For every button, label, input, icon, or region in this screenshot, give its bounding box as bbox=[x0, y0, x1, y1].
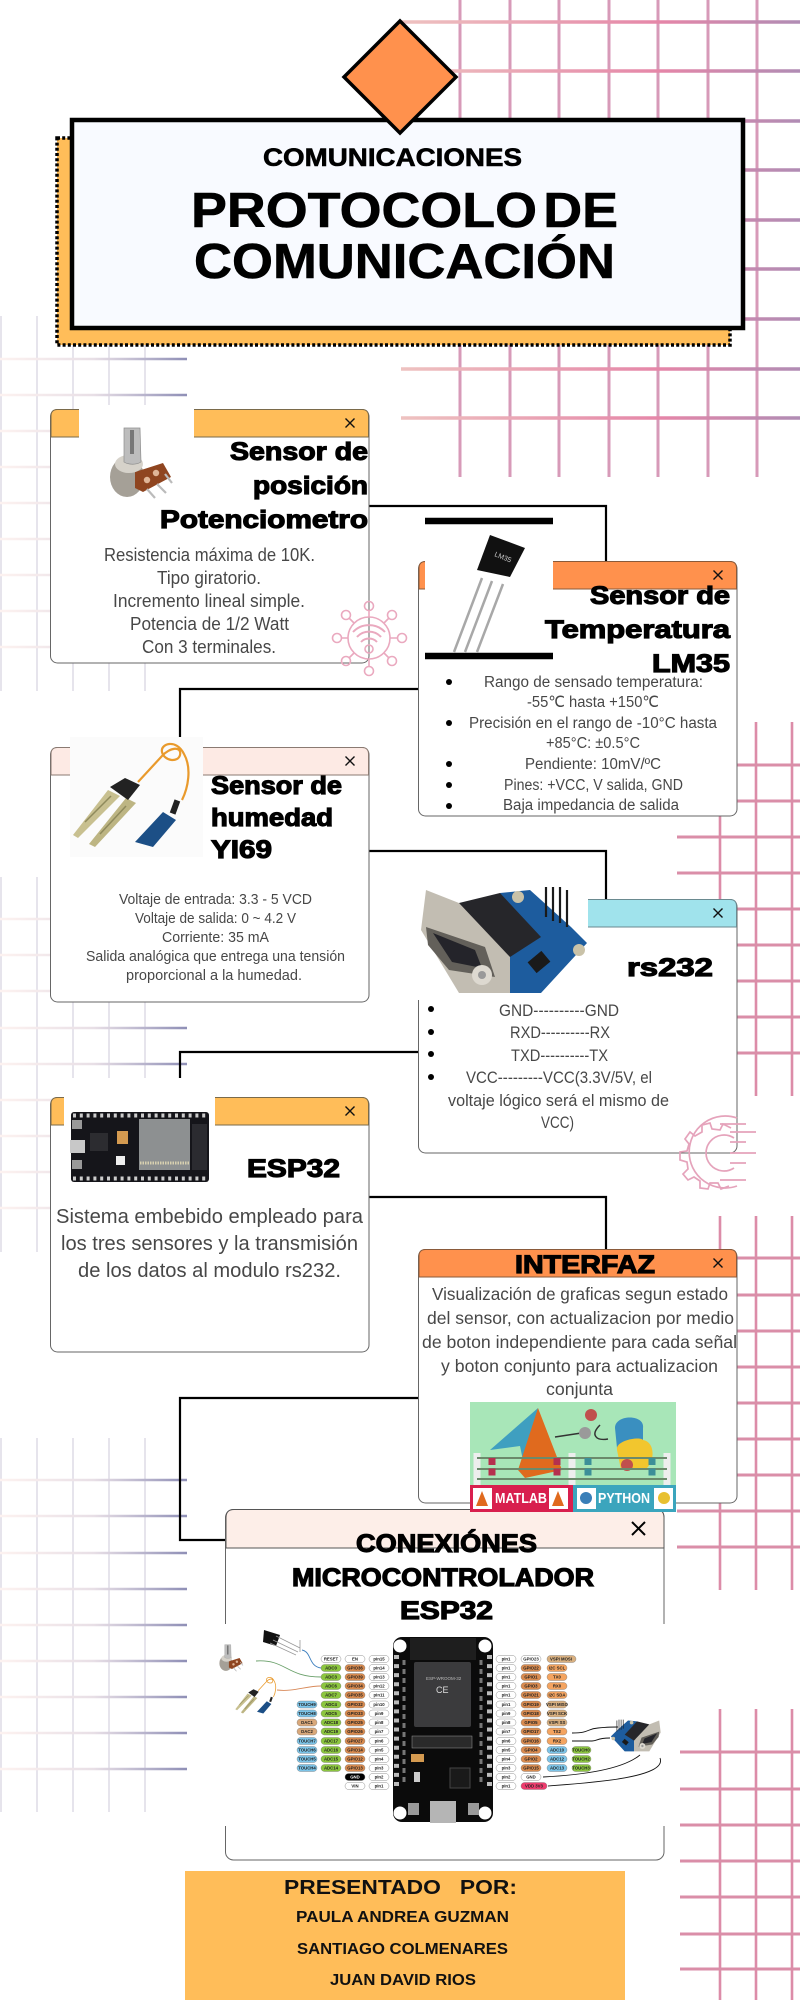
pin labels: ADC14 bbox=[324, 1766, 339, 1771]
text: temperature sensor specs: Rango de sensado temperatura: bbox=[484, 674, 703, 691]
text: ESP32 description bbox=[56, 1206, 364, 1282]
pin labels: GND bbox=[350, 1775, 360, 1780]
connector: potentiometer to LM35 bbox=[369, 506, 606, 561]
pin labels: VDD 3V3 bbox=[525, 1784, 544, 1789]
pin labels: I2C SDA bbox=[549, 1693, 565, 1698]
author name: JUAN DAVID RIOS bbox=[330, 1972, 476, 1989]
icon: LM35 thumbnail bbox=[263, 1630, 300, 1655]
pin labels: pin1 bbox=[502, 1784, 511, 1789]
heading: temperature sensor bbox=[545, 582, 731, 678]
pin labels: TOUCH7 bbox=[298, 1739, 316, 1744]
heading: humidity sensor bbox=[211, 772, 342, 864]
pin labels: RX2 bbox=[553, 1739, 562, 1744]
pin labels: GPIO34 bbox=[347, 1684, 363, 1689]
pin labels: pin1 bbox=[502, 1702, 511, 1707]
pin labels: pin3 bbox=[502, 1766, 511, 1771]
pin labels: pin13 bbox=[373, 1675, 385, 1680]
icon: wireless network bbox=[332, 602, 406, 676]
pin labels: pin2 bbox=[375, 1775, 384, 1780]
pin labels: VSPI SS bbox=[549, 1720, 565, 1725]
pin labels: ADC13 bbox=[550, 1766, 565, 1771]
pin labels: pin14 bbox=[373, 1666, 385, 1671]
icon: circuit gear bbox=[680, 1116, 756, 1189]
icon: close bbox=[346, 756, 354, 766]
icon: close bbox=[714, 1258, 722, 1268]
pin labels: TX0 bbox=[553, 1675, 562, 1680]
heading: interface: INTERFAZ bbox=[515, 1251, 655, 1279]
panel: microcontroller connections bbox=[210, 1510, 680, 1860]
pin labels: ADC16 bbox=[324, 1748, 339, 1753]
heading: connections: ESP32 bbox=[400, 1597, 493, 1625]
pin labels: ADC17 bbox=[324, 1739, 339, 1744]
pin labels: RX0 bbox=[553, 1684, 562, 1689]
panel: potentiometer sensor bbox=[50, 405, 406, 676]
pin labels: I2C SCL bbox=[549, 1666, 566, 1671]
text: temperature sensor specs: Pendiente: 10mV/ºC bbox=[525, 756, 661, 773]
pin labels: TOUCH3 bbox=[572, 1766, 590, 1771]
text: interface description bbox=[422, 1284, 737, 1399]
pin labels: pin10 bbox=[373, 1702, 385, 1707]
pin labels: pin2 bbox=[502, 1775, 511, 1780]
pin labels: GPIO16 bbox=[523, 1739, 539, 1744]
connector: LM35 to humidity sensor bbox=[180, 689, 418, 738]
text: humidity sensor specs: proporcional a la humedad. bbox=[126, 967, 302, 984]
author name: PAULA ANDREA GUZMAN bbox=[296, 1909, 509, 1926]
text: potentiometer specs bbox=[104, 545, 315, 657]
text: ESP32 description: los tres sensores y la transmisión bbox=[61, 1233, 358, 1255]
panel: humidity sensor bbox=[50, 737, 369, 1002]
ESP32 board bbox=[393, 1637, 493, 1823]
pin labels: TOUCH5 bbox=[298, 1757, 316, 1762]
pin labels: GPIO22 bbox=[523, 1666, 539, 1671]
pin labels: ADC15 bbox=[324, 1757, 339, 1762]
pin labels: GPIO23 bbox=[523, 1657, 539, 1662]
text: temperature sensor specs bbox=[446, 674, 717, 814]
text: potentiometer specs: Incremento lineal simple. bbox=[113, 591, 305, 611]
text: interface description: y boton conjunto para actualizacion bbox=[441, 1356, 718, 1376]
pin labels: pin6 bbox=[502, 1739, 511, 1744]
connector: humidity sensor to rs232 bbox=[369, 851, 606, 899]
pin labels: pin7 bbox=[502, 1729, 511, 1734]
pin labels: TOUCH9 bbox=[298, 1702, 316, 1707]
pin labels: GPIO33 bbox=[347, 1711, 363, 1716]
pin labels: TOUCH4 bbox=[298, 1766, 316, 1771]
pin labels: ADC12 bbox=[550, 1757, 565, 1762]
heading: position sensor: posición bbox=[253, 472, 368, 500]
pin labels: GPIO5 bbox=[524, 1720, 538, 1725]
panel: interface bbox=[418, 1250, 737, 1512]
text: interface description: Visualización de graficas segun estado bbox=[432, 1284, 728, 1304]
pin labels: GPIO2 bbox=[524, 1757, 538, 1762]
panel: temperature sensor bbox=[418, 521, 737, 816]
pin labels: pin6 bbox=[375, 1739, 384, 1744]
text: potentiometer specs: Resistencia máxima de 10K. bbox=[104, 545, 315, 565]
pin labels: VIN bbox=[351, 1784, 359, 1789]
pin labels: pin4 bbox=[502, 1757, 511, 1762]
pin labels: ADC7 bbox=[325, 1693, 337, 1698]
pin labels: VSPI MISO bbox=[546, 1702, 569, 1707]
pin labels: ADC19 bbox=[324, 1729, 339, 1734]
wiring lines bbox=[256, 1650, 661, 1786]
pin labels: GPIO36 bbox=[347, 1666, 363, 1671]
icon: close bbox=[714, 908, 722, 918]
text: interface description: conjunta bbox=[546, 1379, 613, 1399]
text: rs232 wiring: RXD----------RX bbox=[510, 1024, 610, 1042]
text: ESP32 description: Sistema embebido empleado para bbox=[56, 1206, 364, 1228]
pin labels: pin9 bbox=[375, 1711, 384, 1716]
text: temperature sensor specs: Pines: +VCC, V salida, GND bbox=[504, 777, 683, 794]
diagram: ESP32 pinout and wiring bbox=[219, 1630, 661, 1823]
pin labels: ADC3 bbox=[325, 1675, 337, 1680]
icon: rs232 module bbox=[421, 887, 587, 993]
illustration: MATLAB vs Python: MATLAB bbox=[495, 1490, 547, 1507]
heading: position sensor: Potenciometro bbox=[160, 506, 368, 534]
heading: temperature sensor: LM35 bbox=[652, 650, 730, 678]
connector: ESP32 to interface bbox=[369, 1197, 606, 1249]
decorative image bars bbox=[425, 521, 553, 656]
icon: ESP32 board bbox=[70, 1112, 209, 1182]
header dotted shadow bbox=[57, 138, 730, 345]
heading: ESP32: ESP32 bbox=[247, 1155, 340, 1183]
pin labels: GPIO26 bbox=[347, 1729, 363, 1734]
pin labels: TOUCH6 bbox=[298, 1748, 316, 1753]
text: rs232 wiring: VCC) bbox=[541, 1114, 574, 1132]
panel: rs232 module bbox=[418, 887, 756, 1189]
panel: authors bbox=[185, 1871, 625, 2000]
text: rs232 wiring bbox=[428, 1002, 669, 1132]
pin labels: pin5 bbox=[502, 1748, 511, 1753]
pin labels: GPIO17 bbox=[523, 1729, 539, 1734]
pin labels: DAC2 bbox=[301, 1729, 313, 1734]
icon: potentiometer thumbnail bbox=[219, 1645, 243, 1671]
pin labels: RESET bbox=[324, 1657, 339, 1662]
text: humidity sensor specs bbox=[86, 891, 345, 984]
header panel bbox=[57, 21, 743, 345]
text: humidity sensor specs: Corriente: 35 mA bbox=[162, 929, 269, 946]
pin labels: GPIO15 bbox=[523, 1766, 539, 1771]
pin labels: pin11 bbox=[374, 1693, 385, 1698]
pin labels: pin7 bbox=[375, 1729, 384, 1734]
icon: close bbox=[346, 1106, 354, 1116]
illustration: MATLAB vs Python: PYTHON bbox=[598, 1490, 650, 1507]
heading: position sensor: Sensor de bbox=[230, 438, 368, 466]
connector: interface to connections bbox=[180, 1398, 418, 1540]
pin labels: GPIO1 bbox=[524, 1675, 538, 1680]
text: humidity sensor specs: Voltaje de salida: 0 ~ 4.2 V bbox=[135, 910, 296, 927]
text: humidity sensor specs: Salida analógica que entrega una tensión bbox=[86, 948, 345, 965]
text: humidity sensor specs: Voltaje de entrada: 3.3 - 5 VCD bbox=[119, 891, 312, 908]
pin labels: ADC6 bbox=[325, 1684, 337, 1689]
pin labels: pin4 bbox=[375, 1757, 384, 1762]
authors heading: PRESENTADO POR: bbox=[284, 1877, 517, 1899]
text: rs232 wiring: TXD----------TX bbox=[511, 1047, 608, 1065]
connector: rs232 to ESP32 bbox=[180, 1052, 418, 1079]
heading: position sensor bbox=[160, 438, 368, 534]
pin labels: TX2 bbox=[553, 1729, 562, 1734]
icon: potentiometer bbox=[110, 428, 172, 498]
text: rs232 wiring: GND----------GND bbox=[499, 1002, 619, 1020]
heading: connections: CONEXIÓNES bbox=[356, 1528, 537, 1558]
heading: temperature sensor: Temperatura bbox=[545, 616, 731, 644]
text: potentiometer specs: Con 3 terminales. bbox=[142, 637, 276, 657]
header box bbox=[72, 120, 743, 328]
heading: humidity sensor: Sensor de bbox=[211, 772, 342, 800]
pin labels: GPIO4 bbox=[524, 1748, 538, 1753]
pin labels: pin1 bbox=[375, 1784, 384, 1789]
pin labels: GPIO13 bbox=[347, 1766, 363, 1771]
author name: SANTIAGO COLMENARES bbox=[297, 1941, 508, 1958]
pin labels: pin1 bbox=[502, 1693, 511, 1698]
illustration: MATLAB vs Python bbox=[470, 1402, 676, 1512]
pin labels: pin8 bbox=[502, 1720, 511, 1725]
text: rs232 wiring: voltaje lógico será el mismo de bbox=[448, 1092, 669, 1110]
icon: rs232 thumbnail bbox=[611, 1720, 661, 1751]
pin labels: ADC4 bbox=[325, 1702, 337, 1707]
pin labels: TOUCH2 bbox=[572, 1757, 590, 1762]
pin labels: GPIO32 bbox=[347, 1702, 363, 1707]
icon: close bbox=[346, 418, 354, 428]
pin labels: GPIO3 bbox=[524, 1684, 538, 1689]
pin labels: pin3 bbox=[375, 1766, 384, 1771]
pin labels: DAC1 bbox=[301, 1720, 313, 1725]
pin labels: pin15 bbox=[373, 1657, 385, 1662]
pin labels: GPIO39 bbox=[347, 1675, 363, 1680]
text: potentiometer specs: Tipo giratorio. bbox=[157, 568, 261, 588]
pin labels: GPIO18 bbox=[523, 1711, 539, 1716]
pin labels: pin1 bbox=[502, 1675, 511, 1680]
diamond ornament bbox=[344, 21, 456, 133]
pin labels: TOUCH0 bbox=[572, 1748, 590, 1753]
title line 2: COMUNICACIÓN bbox=[194, 234, 615, 289]
text: temperature sensor specs: -55℃ hasta +150℃ bbox=[527, 694, 659, 711]
title line 1: PROTOCOLO DE bbox=[191, 184, 618, 238]
icon: soil moisture probe bbox=[73, 744, 188, 847]
icon: close bbox=[714, 570, 722, 580]
pin labels: pin12 bbox=[373, 1684, 385, 1689]
pin labels: pin8 bbox=[375, 1720, 384, 1725]
pin labels: GPIO21 bbox=[523, 1693, 539, 1698]
ESP32 board: ESP-WROOM-32 bbox=[426, 1676, 462, 1681]
pin labels: VSPI MOSI bbox=[550, 1657, 572, 1662]
pin labels: GPIO19 bbox=[523, 1702, 539, 1707]
pin labels: GPIO14 bbox=[347, 1748, 363, 1753]
heading: rs232: rs232 bbox=[627, 954, 713, 982]
pin labels: GPIO27 bbox=[347, 1739, 363, 1744]
pin labels: ADC18 bbox=[324, 1720, 339, 1725]
text: rs232 wiring: VCC---------VCC(3.3V/5V, el bbox=[466, 1069, 652, 1087]
icon: LM35 transistor bbox=[454, 535, 525, 652]
text: interface description: de boton independiente para cada señal bbox=[422, 1332, 737, 1352]
pin labels bbox=[297, 1656, 591, 1790]
subtitle: COMUNICACIONES bbox=[263, 144, 522, 172]
pin labels: GPIO35 bbox=[347, 1693, 363, 1698]
heading: temperature sensor: Sensor de bbox=[590, 582, 730, 610]
pin labels: GPIO12 bbox=[347, 1757, 363, 1762]
text: temperature sensor specs: Precisión en el rango de -10°C hasta bbox=[469, 715, 717, 732]
icon: close bbox=[632, 1522, 645, 1535]
icon: soil probe thumbnail bbox=[235, 1677, 276, 1713]
pin labels: ADC10 bbox=[550, 1748, 565, 1753]
text: temperature sensor specs: Baja impedancia de salida bbox=[503, 797, 679, 814]
pin labels: pin5 bbox=[375, 1748, 384, 1753]
heading: connections bbox=[292, 1528, 594, 1625]
panel: ESP32 bbox=[50, 1078, 369, 1352]
pin labels: GND bbox=[526, 1775, 536, 1780]
heading: humidity sensor: humedad bbox=[211, 804, 333, 832]
ESP32 board: CE bbox=[436, 1685, 449, 1695]
pin labels: EN bbox=[352, 1657, 358, 1662]
pin labels: GPIO25 bbox=[347, 1720, 363, 1725]
pin labels: pin1 bbox=[502, 1684, 511, 1689]
pin labels: pin1 bbox=[502, 1657, 511, 1662]
text: potentiometer specs: Potencia de 1/2 Watt bbox=[130, 614, 289, 634]
text: temperature sensor specs: +85°C: ±0.5°C bbox=[546, 735, 640, 752]
icon: LM35 transistor: LM35 bbox=[493, 551, 512, 564]
pin labels: pin1 bbox=[502, 1666, 511, 1671]
pin labels: ADC0 bbox=[325, 1666, 337, 1671]
pin labels: pin9 bbox=[502, 1711, 511, 1716]
pin labels: ADC5 bbox=[325, 1711, 337, 1716]
text: interface description: del sensor, con actualizacion por medio bbox=[427, 1308, 734, 1328]
heading: connections: MICROCONTROLADOR bbox=[292, 1564, 594, 1592]
pin labels: TOUCH8 bbox=[298, 1711, 316, 1716]
text: ESP32 description: de los datos al modulo rs232. bbox=[78, 1260, 341, 1282]
pin labels: VSPI SCK bbox=[547, 1711, 568, 1716]
heading: humidity sensor: YI69 bbox=[211, 836, 272, 864]
